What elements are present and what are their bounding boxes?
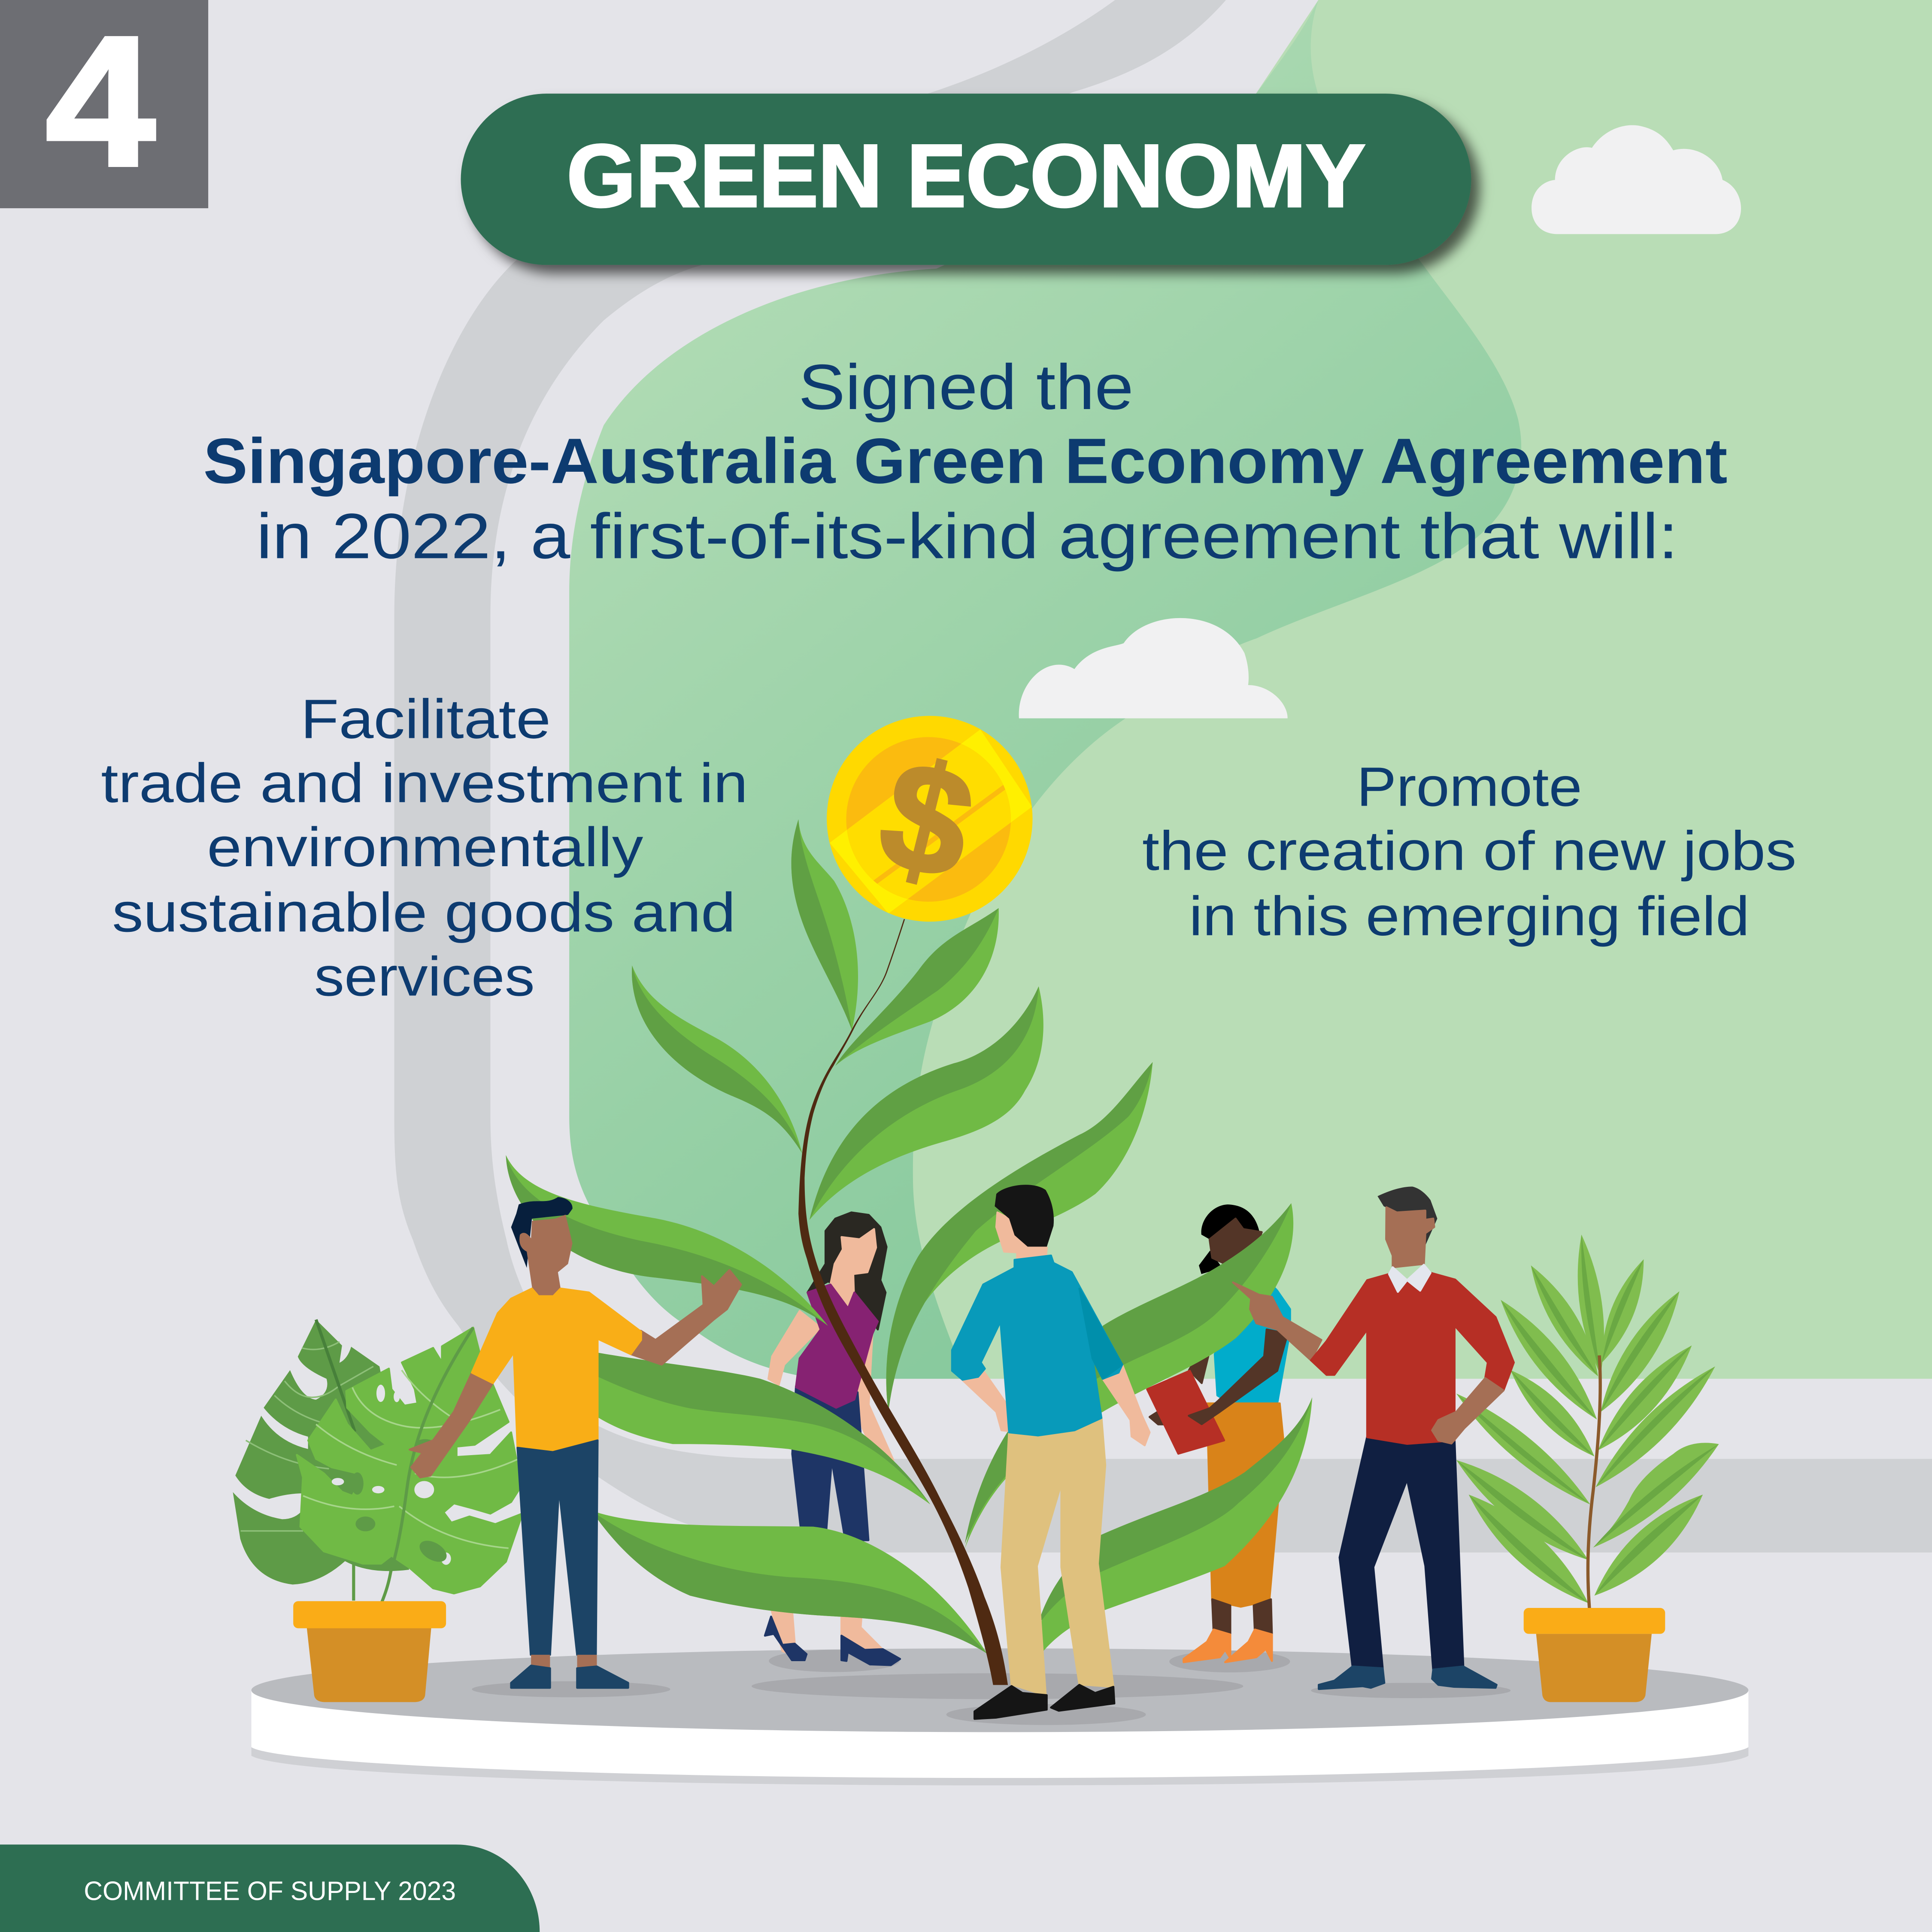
left text: facilitate: sustainable goods and <box>112 882 736 943</box>
mid green blob <box>569 0 1521 1379</box>
long leaf behind man in teal <box>886 1062 1153 1412</box>
light green background shape <box>862 0 1932 1379</box>
ankles <box>531 1655 597 1668</box>
front leaf holes <box>332 1385 451 1565</box>
left arm <box>409 1373 493 1477</box>
plant stem <box>798 919 1008 1685</box>
lower right leaf <box>1037 1397 1312 1652</box>
plant leaves <box>506 819 1312 1653</box>
shoes <box>1183 1629 1230 1662</box>
hair <box>995 1185 1054 1247</box>
front leaf spots <box>351 1439 450 1566</box>
man in teal <box>952 1185 1149 1719</box>
footer tab: COMMITTEE OF SUPPLY 2023 <box>84 1876 456 1906</box>
leaf under coin <box>835 908 999 1066</box>
front leaf veins <box>303 1370 519 1548</box>
horizontal leaf bottom <box>591 1510 987 1653</box>
shoes <box>1319 1666 1384 1689</box>
trousers <box>1340 1437 1463 1671</box>
man in yellow <box>409 1197 741 1688</box>
hair <box>1377 1186 1437 1246</box>
right text: promote: in this emerging field <box>1189 886 1750 947</box>
top <box>796 1285 878 1408</box>
front leaf midrib <box>391 1328 473 1572</box>
skirt <box>1207 1404 1283 1607</box>
leaf upper left of stem <box>792 819 858 1030</box>
back leaf midrib <box>316 1319 355 1432</box>
woman in purple <box>765 1213 900 1665</box>
right text: promote: the creation of new jobs <box>1142 820 1796 882</box>
man in red <box>1233 1186 1514 1689</box>
leaf tail behind man in teal <box>965 1417 1035 1549</box>
stems <box>354 1559 392 1602</box>
shoes <box>765 1617 807 1660</box>
arms <box>962 1371 1022 1432</box>
left text: facilitate: environmentally <box>207 816 643 878</box>
face <box>1210 1219 1262 1264</box>
left text: facilitate: Facilitate <box>300 688 551 750</box>
face and neck <box>996 1213 1047 1260</box>
palm stem <box>1588 1356 1600 1609</box>
platform <box>252 1648 1748 1785</box>
left pot <box>293 1601 446 1702</box>
footer tab <box>0 1844 540 1932</box>
shirt <box>952 1256 1122 1435</box>
t-shirt <box>472 1289 641 1452</box>
clipboard <box>1147 1371 1224 1454</box>
intro text: Singapore-Australia Green Economy Agreement <box>203 425 1727 497</box>
back arm <box>1189 1356 1208 1383</box>
coin <box>827 716 1033 922</box>
hair <box>1199 1204 1261 1274</box>
leaf over woman right <box>1084 1203 1293 1413</box>
sweater <box>1311 1273 1514 1444</box>
title pill: GREEN ECONOMY <box>567 126 1365 225</box>
lower legs <box>771 1608 801 1657</box>
woman with clipboard <box>1147 1204 1290 1662</box>
trousers <box>792 1386 868 1540</box>
arms <box>768 1311 821 1385</box>
arm pointing <box>1233 1283 1321 1360</box>
big leaf right of stem <box>810 986 1043 1220</box>
palm plant <box>1456 1234 1719 1609</box>
sleeve shade <box>1080 1289 1122 1379</box>
monstera plant <box>233 1319 522 1602</box>
number tile <box>0 0 208 208</box>
right text: promote <box>1142 756 1796 947</box>
back leaf veins <box>241 1342 373 1531</box>
trousers <box>518 1441 597 1655</box>
shoes <box>974 1686 1047 1719</box>
title pill <box>461 94 1471 265</box>
back leaf <box>233 1319 409 1585</box>
cloud middle <box>1019 618 1288 719</box>
right pot <box>1524 1608 1665 1702</box>
left text: facilitate: services <box>314 946 535 1007</box>
shirt <box>1215 1269 1290 1407</box>
hair <box>511 1197 573 1268</box>
palm leaves light <box>1456 1234 1719 1603</box>
palm leaves dark <box>1456 1234 1719 1603</box>
arm on hip <box>1432 1378 1504 1444</box>
horizontal leaf top <box>506 1155 828 1326</box>
face <box>831 1229 876 1309</box>
shoes <box>511 1665 550 1688</box>
face <box>1386 1207 1434 1267</box>
cloud top right <box>1532 125 1741 234</box>
left text: facilitate <box>101 688 748 1007</box>
intro text: in 2022, a first-of-its-kind agreement that will: <box>256 500 1678 572</box>
grey curved ribbon <box>394 0 1932 1553</box>
number tile: 4 <box>45 0 157 205</box>
collar <box>1389 1267 1407 1292</box>
head and neck <box>519 1215 573 1297</box>
leaf far left of stem <box>632 965 802 1153</box>
legs <box>1212 1599 1230 1634</box>
trousers <box>1001 1418 1113 1695</box>
left text: facilitate: trade and investment in <box>101 752 748 814</box>
right arm <box>631 1270 741 1365</box>
front leaf <box>297 1328 522 1593</box>
hair <box>807 1213 886 1329</box>
front arm <box>1189 1329 1288 1424</box>
intro text <box>203 351 1727 572</box>
right text: promote: Promote <box>1356 756 1582 818</box>
horizontal leaf middle <box>579 1349 930 1504</box>
coin: $ <box>865 727 989 913</box>
intro text: Signed the <box>798 351 1134 423</box>
